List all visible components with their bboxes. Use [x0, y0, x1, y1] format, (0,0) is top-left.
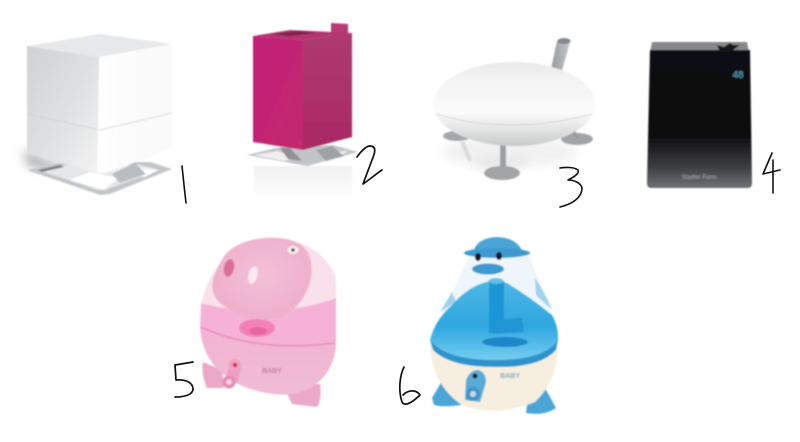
number 3: [560, 167, 582, 207]
tab: [331, 23, 348, 36]
beak: [472, 264, 504, 274]
dome: [433, 62, 595, 146]
side flippers: [535, 278, 552, 310]
dial: [465, 370, 486, 402]
product 4: black humidifier with display: [647, 42, 752, 188]
product 3: white dome humidifier on three legs: [433, 38, 595, 180]
eyes: [475, 253, 481, 261]
eye: [288, 246, 298, 254]
center tube: [489, 281, 504, 333]
brand label: BABY: [262, 368, 282, 375]
lower base: [200, 326, 336, 395]
number 2: [357, 146, 382, 184]
cube: [27, 34, 172, 57]
centre glow: [239, 319, 275, 337]
feet: [202, 362, 224, 388]
water tank: [200, 298, 336, 347]
body: [647, 50, 752, 188]
dial: [226, 366, 241, 388]
nostrils: [222, 258, 236, 278]
display reading: 48: [732, 70, 744, 81]
hat: [473, 237, 523, 253]
knob: [717, 43, 740, 52]
legs and feet: [460, 142, 472, 161]
body: [253, 30, 352, 40]
spout: [548, 41, 570, 85]
cream base: [430, 345, 558, 411]
number 1: [182, 166, 186, 203]
blue tank: [430, 281, 558, 362]
product 1: white cube humidifier: [22, 34, 172, 195]
number 6: [400, 367, 420, 404]
base: [247, 145, 358, 166]
product 6: blue penguin humidifier: [430, 237, 558, 414]
feet: [432, 381, 466, 406]
pale upper dome: [201, 243, 336, 312]
brand label: Stadler Form: [682, 175, 716, 181]
number 4: [763, 153, 780, 193]
head: [212, 238, 312, 320]
number 5: [175, 362, 193, 397]
white head: [432, 252, 558, 338]
brand label: BABY: [500, 373, 520, 380]
base plate: [27, 162, 172, 195]
product 5: pink pig humidifier: [200, 238, 336, 407]
product 2: magenta toaster-shaped humidifier: [247, 23, 358, 194]
